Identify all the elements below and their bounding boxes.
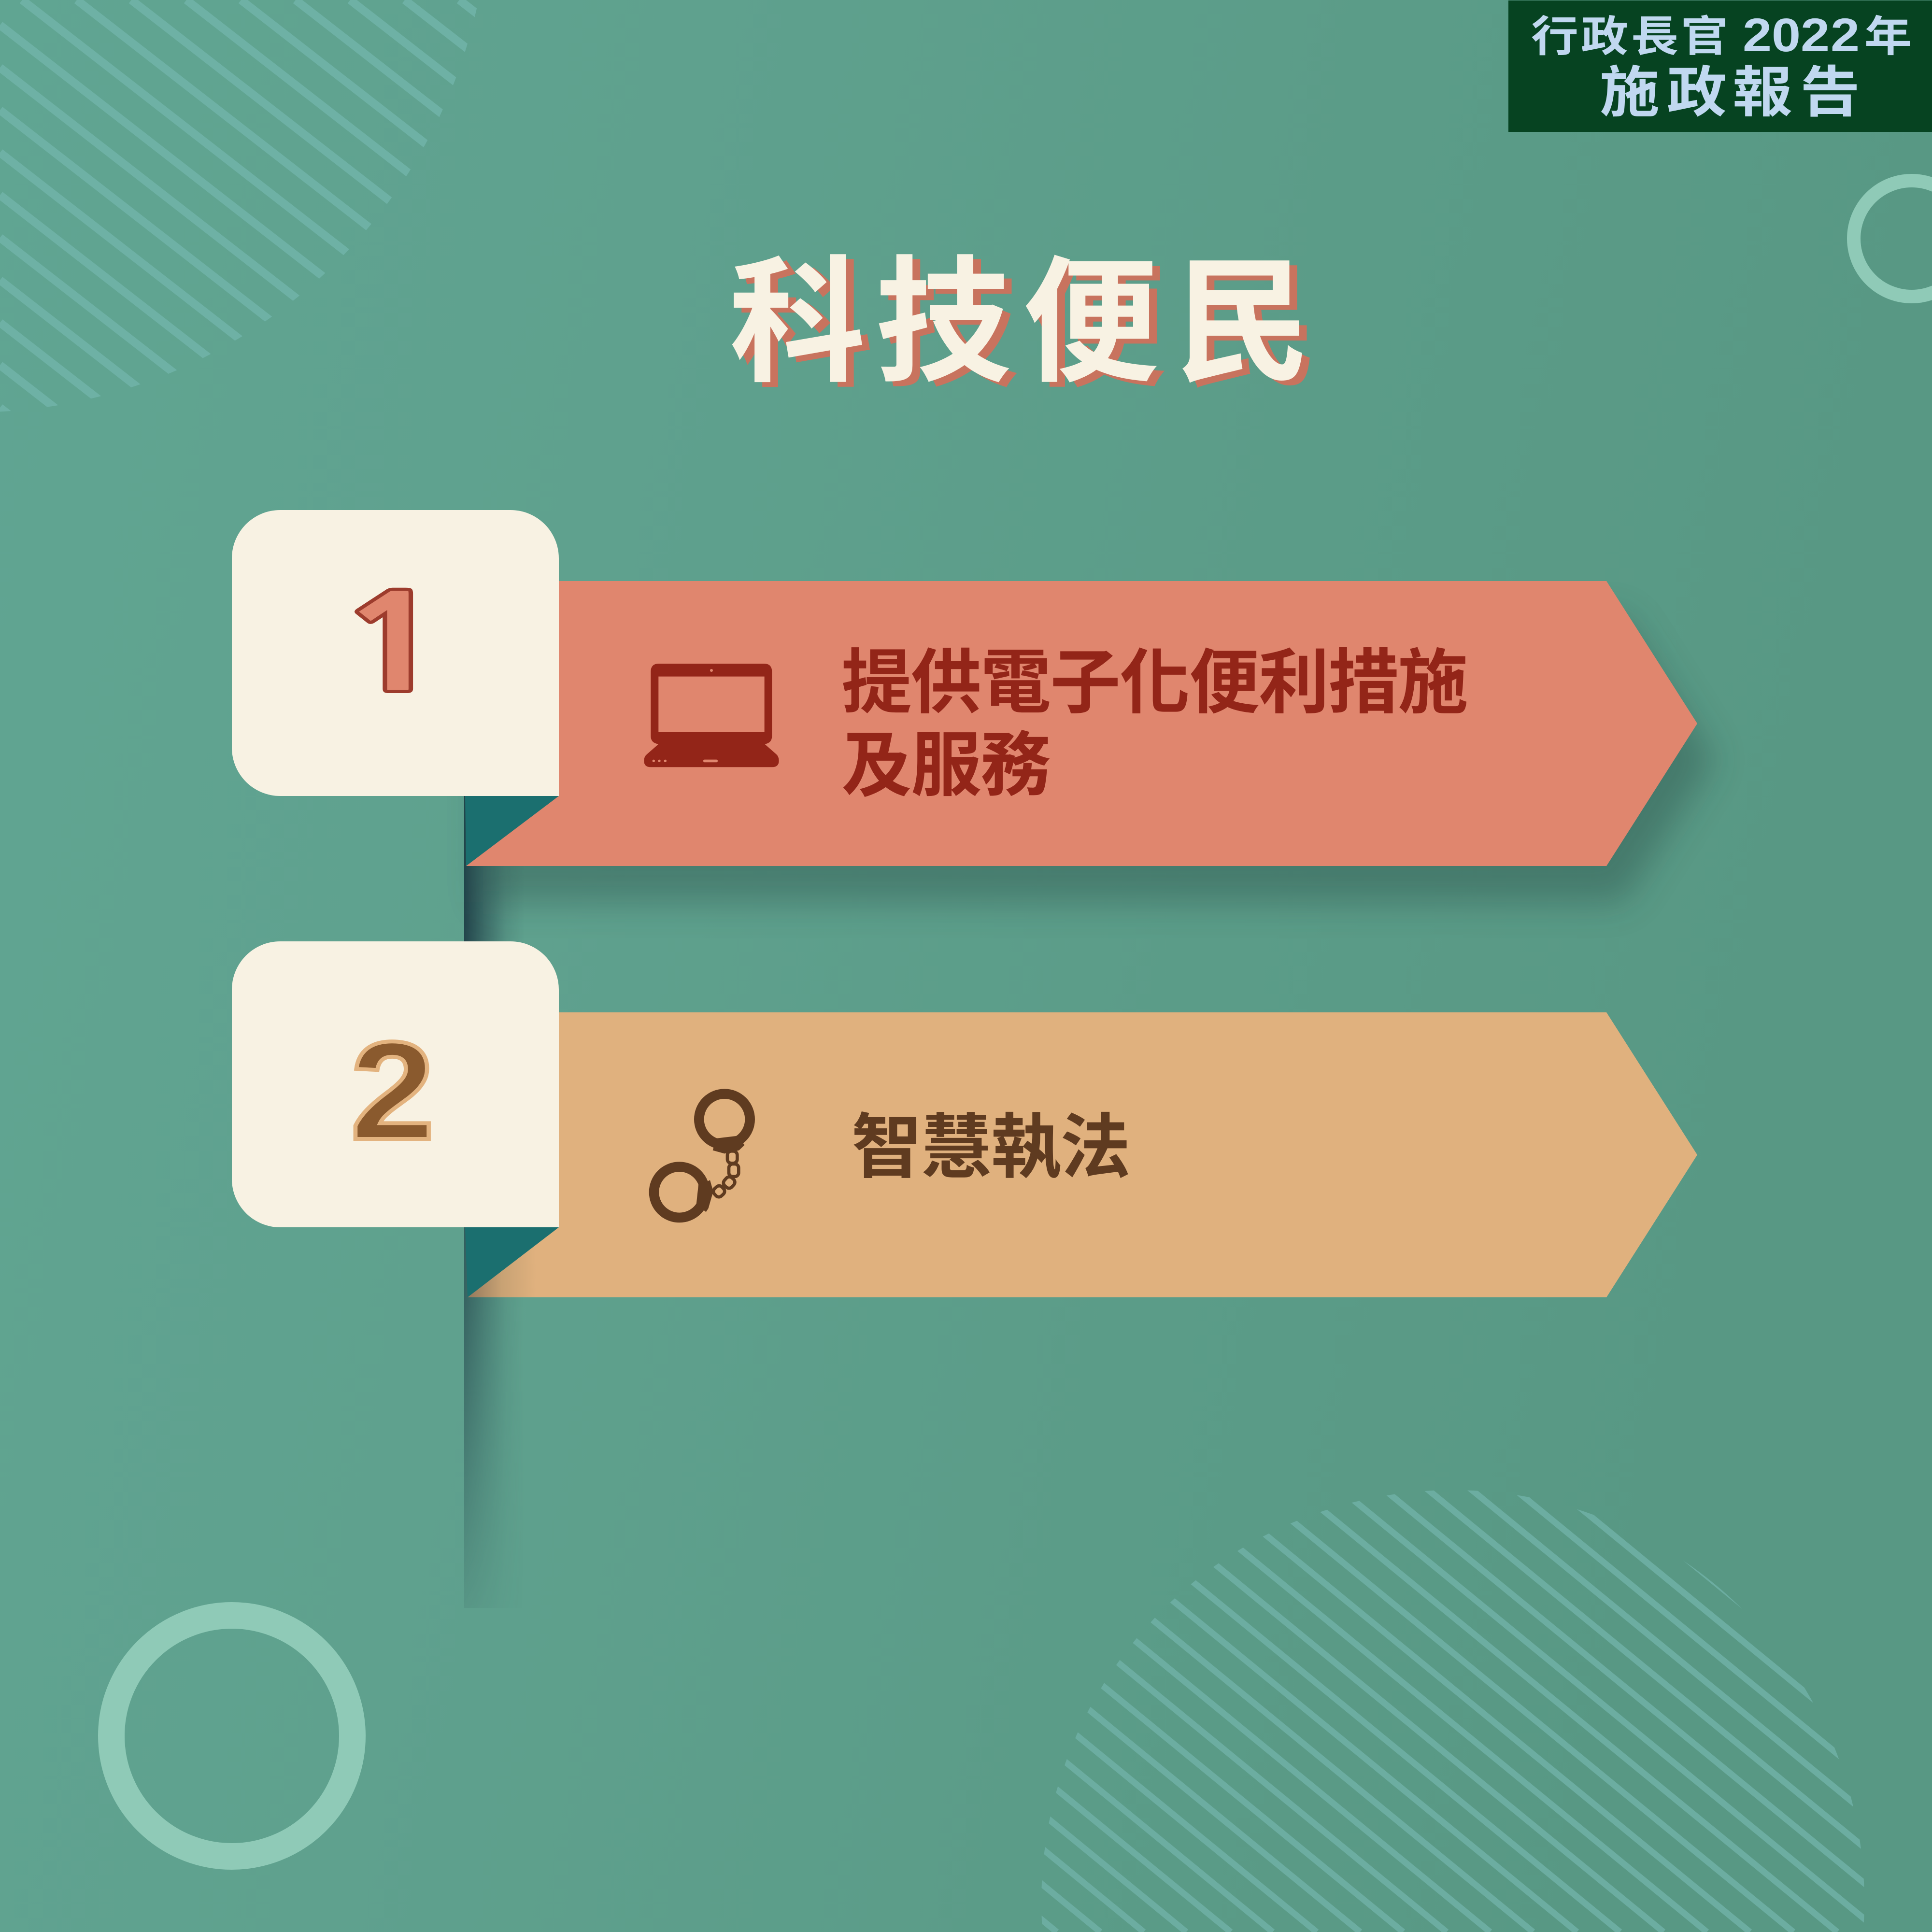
ribbon 1 text: 提供電子化便利措施 — [841, 643, 1467, 722]
decorative ring bottom left — [111, 1615, 353, 1857]
title: 科技便民 — [729, 247, 1311, 399]
decorative ring top right — [1854, 181, 1932, 297]
icon: laptop — [644, 664, 779, 767]
icon: handcuffs — [654, 1094, 750, 1218]
decorative striped circle bottom right — [1041, 1491, 1864, 1932]
ribbon 2 — [468, 1012, 1697, 1297]
card 1 — [232, 510, 559, 796]
decorative striped circle top left — [0, 0, 477, 412]
ribbon 1 text: 及服務 — [841, 726, 1050, 805]
card 2 — [232, 941, 559, 1227]
badge: policy address — [1508, 0, 1932, 132]
badge line 1: 行政長官 — [1531, 13, 1728, 60]
badge line 1: 2022 — [1743, 9, 1860, 61]
ribbon 1 text — [841, 643, 1467, 805]
ribbon 2 text: 智慧執法 — [852, 1108, 1130, 1187]
ribbon 1 — [466, 581, 1697, 866]
number 2: 2 — [350, 1013, 435, 1169]
shadow strip under ribbons — [464, 796, 514, 1608]
fold triangle 1 — [465, 796, 559, 866]
number 1: 1 — [337, 579, 451, 710]
fold triangle 2 — [465, 1227, 559, 1297]
badge line 1: 年 — [1864, 13, 1912, 60]
badge line 2: 施政報告 — [1600, 62, 1860, 124]
ribbon 1 shadow — [483, 617, 1714, 902]
